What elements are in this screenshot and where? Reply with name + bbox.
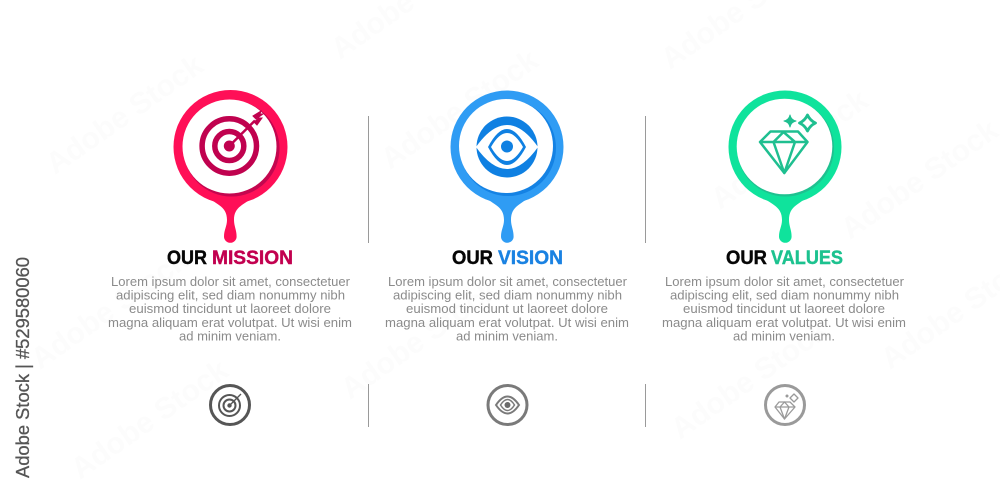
text block: mission body: euismod tincidunt ut laoreet dolore [129, 302, 331, 316]
infographic canvas: Adobe Stock [25, 243, 194, 376]
icon: target [202, 111, 263, 173]
infographic canvas: Adobe Stock [705, 83, 874, 216]
infographic canvas: Adobe Stock [65, 353, 234, 486]
text block: values body: euismod tincidunt ut laoreet dolore [683, 302, 885, 316]
text block: mission body: adipiscing elit, sed diam nonummy nibh [116, 288, 345, 302]
text block: mission body: Lorem ipsum dolor sit amet, consectetuer [111, 275, 350, 289]
heading: our values: VALUES [771, 248, 843, 269]
heading: our vision [452, 248, 563, 269]
heading: our mission [167, 248, 293, 269]
credit: adobe stock id: Adobe Stock | #529580060 [13, 257, 33, 478]
text block: values body: ad minim veniam. [733, 330, 835, 344]
icon: eye [476, 116, 538, 178]
mission pin [174, 90, 288, 243]
values pin [728, 90, 842, 243]
icon: small eye [488, 386, 527, 424]
text block: vision body: magna aliquam erat volutpat. Ut wisi enim [385, 316, 629, 330]
infographic canvas: Adobe Stock [40, 48, 209, 181]
icon: small diamond [766, 386, 804, 424]
heading: our vision: VISION [498, 248, 563, 269]
vision pin [450, 90, 564, 243]
text block: mission body: ad minim veniam. [179, 330, 281, 344]
text block: vision body [385, 275, 629, 344]
infographic canvas: Adobe Stock [835, 113, 1000, 246]
heading: our mission: MISSION [212, 248, 293, 269]
text block: vision body: euismod tincidunt ut laoreet dolore [406, 302, 608, 316]
panel: our vision [385, 90, 629, 424]
panel: our mission [108, 90, 352, 424]
heading: our mission: OUR [167, 248, 207, 269]
text block: mission body: magna aliquam erat volutpat. Ut wisi enim [108, 316, 352, 330]
infographic canvas: Adobe Stock [665, 313, 834, 446]
text block: values body: adipiscing elit, sed diam nonummy nibh [670, 288, 899, 302]
text block: values body [662, 275, 906, 344]
text block: vision body: Lorem ipsum dolor sit amet, consectetuer [388, 275, 627, 289]
heading: our vision: OUR [452, 248, 493, 269]
infographic canvas: Adobe Stock [375, 43, 544, 176]
text block: values body: magna aliquam erat volutpat. Ut wisi enim [662, 316, 906, 330]
heading: our values [726, 248, 843, 269]
text block: vision body: ad minim veniam. [456, 330, 558, 344]
infographic canvas: Adobe Stock [335, 273, 504, 406]
icon: small target [210, 386, 250, 424]
text block: values body: Lorem ipsum dolor sit amet, consectetuer [665, 275, 904, 289]
icon: diamond [760, 115, 816, 173]
heading: our values: OUR [726, 248, 767, 269]
text block: mission body [108, 275, 352, 344]
panel: our values [662, 90, 906, 424]
text block: vision body: adipiscing elit, sed diam nonummy nibh [393, 288, 622, 302]
